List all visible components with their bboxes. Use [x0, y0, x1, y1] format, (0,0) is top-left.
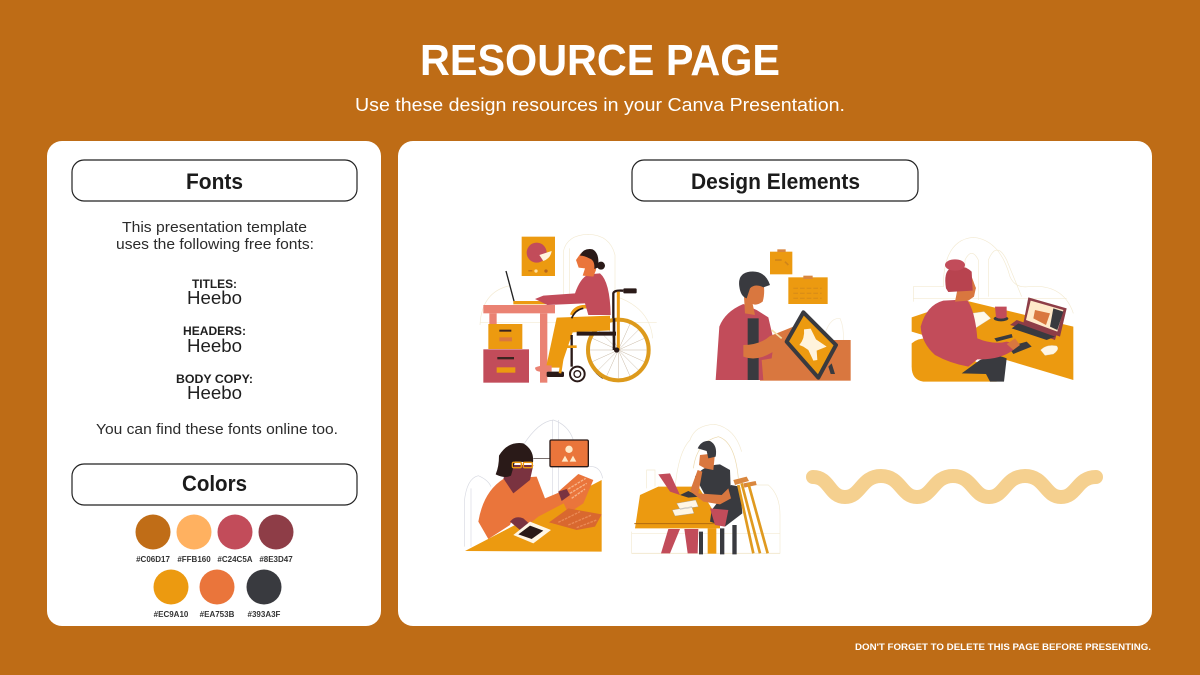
text block: headers font: HEADERS:	[183, 324, 246, 338]
illustration: man drawing on tablet	[716, 249, 851, 381]
text block: body copy font: BODY COPY:	[176, 372, 253, 386]
text block: titles font: Heebo	[187, 288, 242, 308]
heading: design elements: Design Elements	[691, 169, 860, 194]
color swatches: #8E3D47	[259, 555, 293, 564]
color swatches	[136, 514, 294, 619]
footer note: DON'T FORGET TO DELETE THIS PAGE BEFORE PRESENTING.	[855, 642, 1151, 653]
color swatches: #EA753B	[200, 610, 235, 619]
heading: colors	[72, 464, 357, 505]
text block: intro: This presentation template	[122, 220, 307, 236]
subtitle: Use these design resources in your Canva Presentation.	[355, 95, 845, 115]
color swatches: #C06D17	[136, 555, 170, 564]
heading: fonts: Fonts	[186, 169, 243, 194]
heading: colors: Colors	[182, 471, 247, 496]
color swatches: #FFB160	[177, 555, 211, 564]
illustration: person in wheelchair at desk	[480, 234, 657, 383]
heading: fonts	[72, 160, 357, 201]
text block: headers font: Heebo	[187, 336, 242, 356]
color swatches: #EC9A10	[154, 610, 189, 619]
illustration: woman with calculator and papers	[464, 420, 603, 552]
text block: titles font	[187, 277, 242, 308]
panel: design elements	[398, 141, 1152, 626]
color swatches: #393A3F	[248, 610, 281, 619]
text block: headers font	[183, 324, 246, 356]
illustration: designer from behind at laptop	[912, 237, 1073, 382]
title: RESOURCE PAGE	[420, 36, 780, 85]
text block: intro	[116, 220, 314, 253]
text block: titles font: TITLES:	[192, 277, 237, 291]
text block: fonts note: You can find these fonts online too.	[96, 422, 338, 438]
text block: body copy font	[176, 372, 253, 403]
text block: intro: uses the following free fonts:	[116, 237, 314, 253]
panel: fonts and colors	[47, 141, 381, 626]
color swatches: #C24C5A	[217, 555, 253, 564]
heading: design elements	[632, 160, 918, 201]
wavy line decoration	[813, 476, 1096, 497]
illustration: man with crutches at laptop	[632, 424, 780, 554]
text block: body copy font: Heebo	[187, 383, 242, 403]
